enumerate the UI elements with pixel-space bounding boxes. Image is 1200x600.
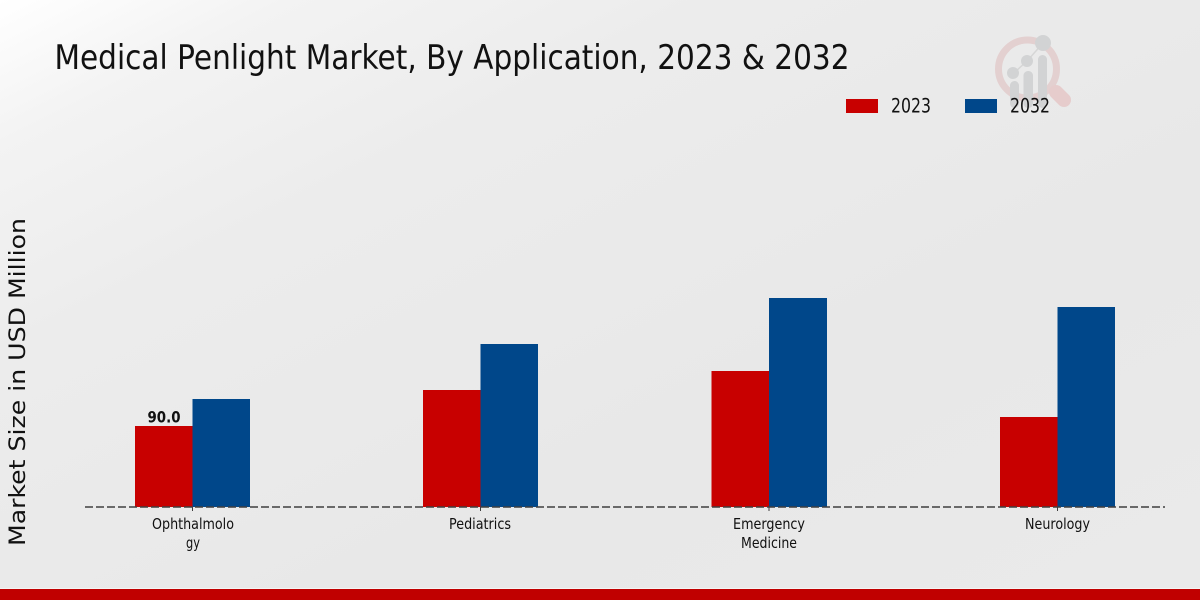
value label: 90.0 <box>148 408 180 426</box>
group: Ophthalmology <box>135 399 250 507</box>
label: Emergency Medicine: Medicine <box>741 534 797 552</box>
label: Ophthalmology <box>152 515 234 552</box>
title: Medical Penlight Market, By Application, 2023 & 2032 <box>54 38 850 78</box>
footer bar <box>0 588 1200 600</box>
legend <box>846 94 1050 118</box>
group: Pediatrics <box>423 344 538 507</box>
legend item: 2023 <box>846 94 931 118</box>
bar chart <box>135 298 1115 507</box>
label: Emergency Medicine: Emergency <box>733 515 805 533</box>
label: Ophthalmology: Ophthalmolo <box>152 515 234 533</box>
label: Ophthalmology: gy <box>186 534 200 552</box>
label: Emergency Medicine <box>733 515 805 552</box>
group: Emergency Medicine <box>712 298 827 507</box>
y-axis label: Market Size in USD Million <box>5 218 31 546</box>
x-axis baseline <box>85 507 1165 511</box>
label: Neurology: Neurology <box>1025 515 1090 533</box>
group: Neurology <box>1000 307 1115 507</box>
x-axis labels <box>152 515 1090 552</box>
legend item: 2032: 2032 <box>1010 94 1050 118</box>
icon: watermark logo <box>998 35 1064 108</box>
legend item: 2032 <box>965 94 1050 118</box>
label: Pediatrics: Pediatrics <box>449 515 511 533</box>
legend item: 2023: 2023 <box>891 94 931 118</box>
